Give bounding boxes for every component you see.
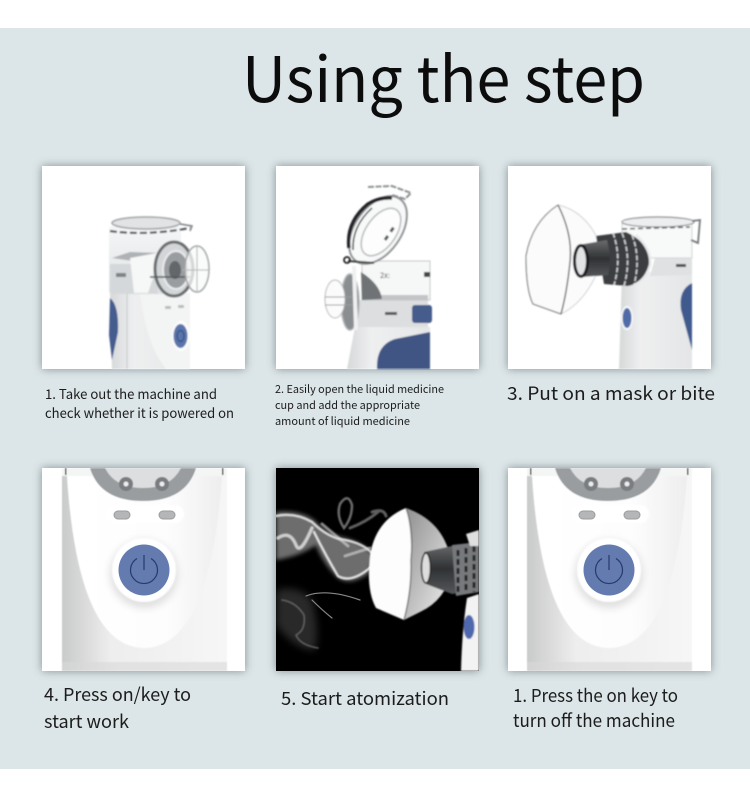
panel: step 5 image [276, 468, 479, 671]
step 6 caption [513, 682, 678, 733]
panel: step 6 image [508, 468, 711, 671]
panel: step 2 image [276, 166, 479, 369]
icon: nebulizer with open lid: 2x: [380, 270, 390, 281]
step 3 caption: 3. Put on a mask or bite [507, 380, 715, 406]
icon: nebulizer with open lid [325, 186, 432, 369]
step 4 caption: 4. Press on/key to [44, 681, 191, 707]
step 2 caption [275, 381, 444, 429]
step 4 caption [44, 681, 191, 734]
step 2 caption: amount of liquid medicine [275, 413, 410, 429]
icon: device close-up with power button [527, 468, 692, 671]
icon: nebulizer with open-front view [109, 217, 209, 369]
icon: device close-up with power button [62, 468, 227, 671]
step 1 caption: check whether it is powered on [45, 402, 234, 422]
step 6 caption: turn off the machine [513, 707, 675, 733]
icon: mask [369, 508, 479, 671]
panel: step 4 image [42, 468, 245, 671]
step 1 caption [45, 383, 234, 422]
icon: nebulizer with mask [526, 205, 700, 369]
step 2 caption: 2. Easily open the liquid medicine [275, 381, 444, 397]
step 5 caption: 5. Start atomization [281, 685, 449, 711]
step 1 caption: 1. Take out the machine and [45, 383, 217, 403]
panel: step 3 image [508, 166, 711, 369]
step 6 caption: 1. Press the on key to [513, 682, 678, 708]
title: Using the step [242, 30, 645, 121]
step 4 caption: start work [44, 708, 129, 734]
smoke [276, 498, 386, 650]
panel: step 1 image [42, 166, 245, 369]
step 2 caption: cup and add the appropriate [275, 397, 420, 413]
